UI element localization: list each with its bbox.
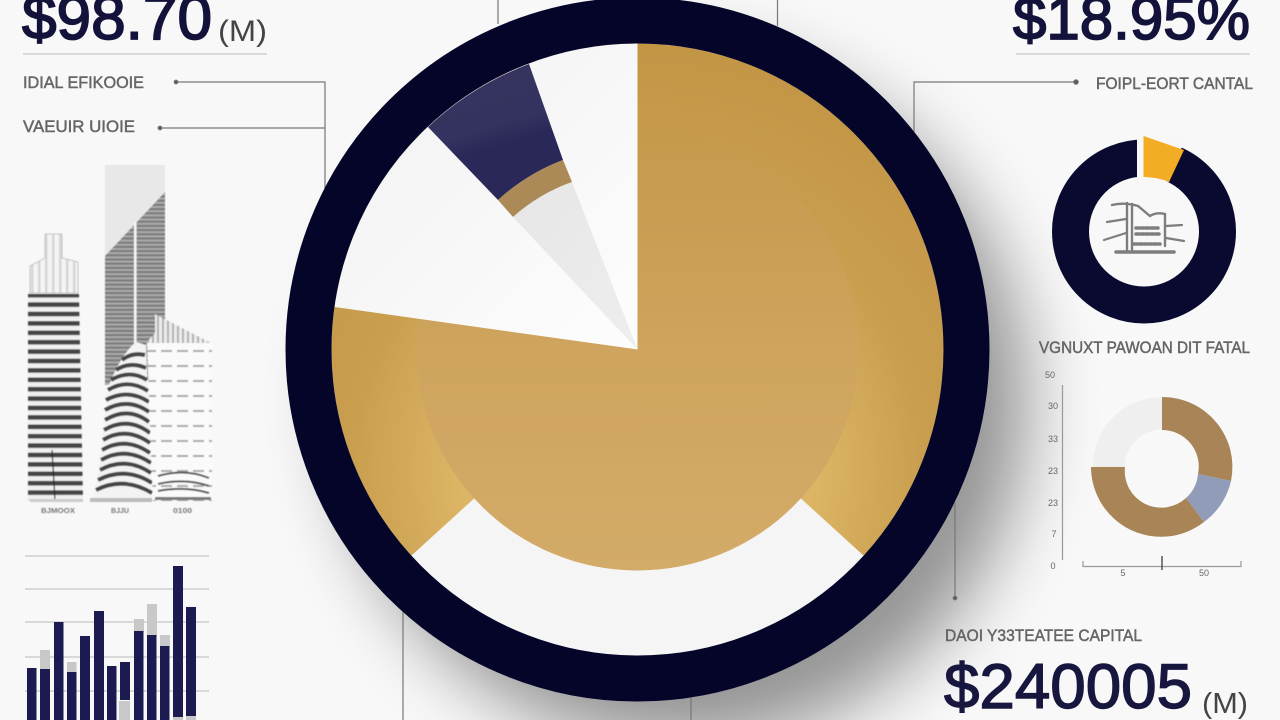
drop shadow under main circle [337,57,1027,720]
tan segment upper right [1162,397,1232,481]
right block tower [146,314,212,501]
left round tower [28,234,83,502]
donut chart: navy with gold slice [1070,136,1218,305]
label: second left caption: VAEUIR UIOIE [23,117,135,136]
small donut chart with axes [1045,370,1241,578]
label: bottom right caption: DAOI Y33TEATEE CAPITAL [945,626,1142,645]
heading: small donut chart: VGNUXT PAWOAN DIT FATAL [1039,338,1250,357]
navy wedge segment [428,64,563,200]
gold base disc [332,44,944,656]
stat: top left value: (M) [218,15,267,48]
bar chart [25,556,209,720]
axis labels: 33 [1048,434,1058,444]
axes [1062,385,1241,570]
white upper left wedge [334,44,638,350]
main pie chart [308,20,966,678]
tower captions [41,508,192,515]
axis labels: 23 [1048,466,1058,476]
tan segment lower [1091,467,1204,537]
tan wedge segment [498,160,572,217]
navy bars [27,566,196,720]
tower captions: BJMOOX [41,508,75,515]
back tower [105,165,165,385]
axis labels [1045,370,1209,578]
light grey wedge segment [513,182,638,350]
white lower ring segment [411,350,864,656]
tower captions: 0100 [173,508,192,515]
blue grey segment [1186,474,1231,522]
axis labels: 50 [1045,370,1055,380]
axis labels: 50 [1199,568,1209,578]
stat: bottom right value: $240005 [944,652,1192,720]
navy outer ring [308,20,966,678]
light segment [1093,397,1162,467]
connector lines [158,0,1078,720]
axis labels: 7 [1051,529,1057,539]
label: first left caption: IDIAL EFIKOOIE [23,73,144,92]
illustration: skyscrapers [28,165,212,515]
axis labels: 0 [1050,561,1056,571]
front curved tower [90,342,152,502]
axis labels: 23 [1048,498,1058,508]
label: right caption: FOIPL-EORT CANTAL [1096,74,1253,93]
chart grid lines [25,556,209,691]
inner gold disc [416,128,858,570]
grey stacked bar tops [40,604,196,720]
donut gap [1137,136,1186,182]
gold slice [1144,136,1184,182]
icon: factory [1104,203,1184,252]
axis labels: 30 [1048,401,1058,411]
axis labels: 5 [1120,568,1126,578]
stat: bottom right value: (M) [1202,688,1248,720]
tower captions: BJJU [111,508,129,515]
